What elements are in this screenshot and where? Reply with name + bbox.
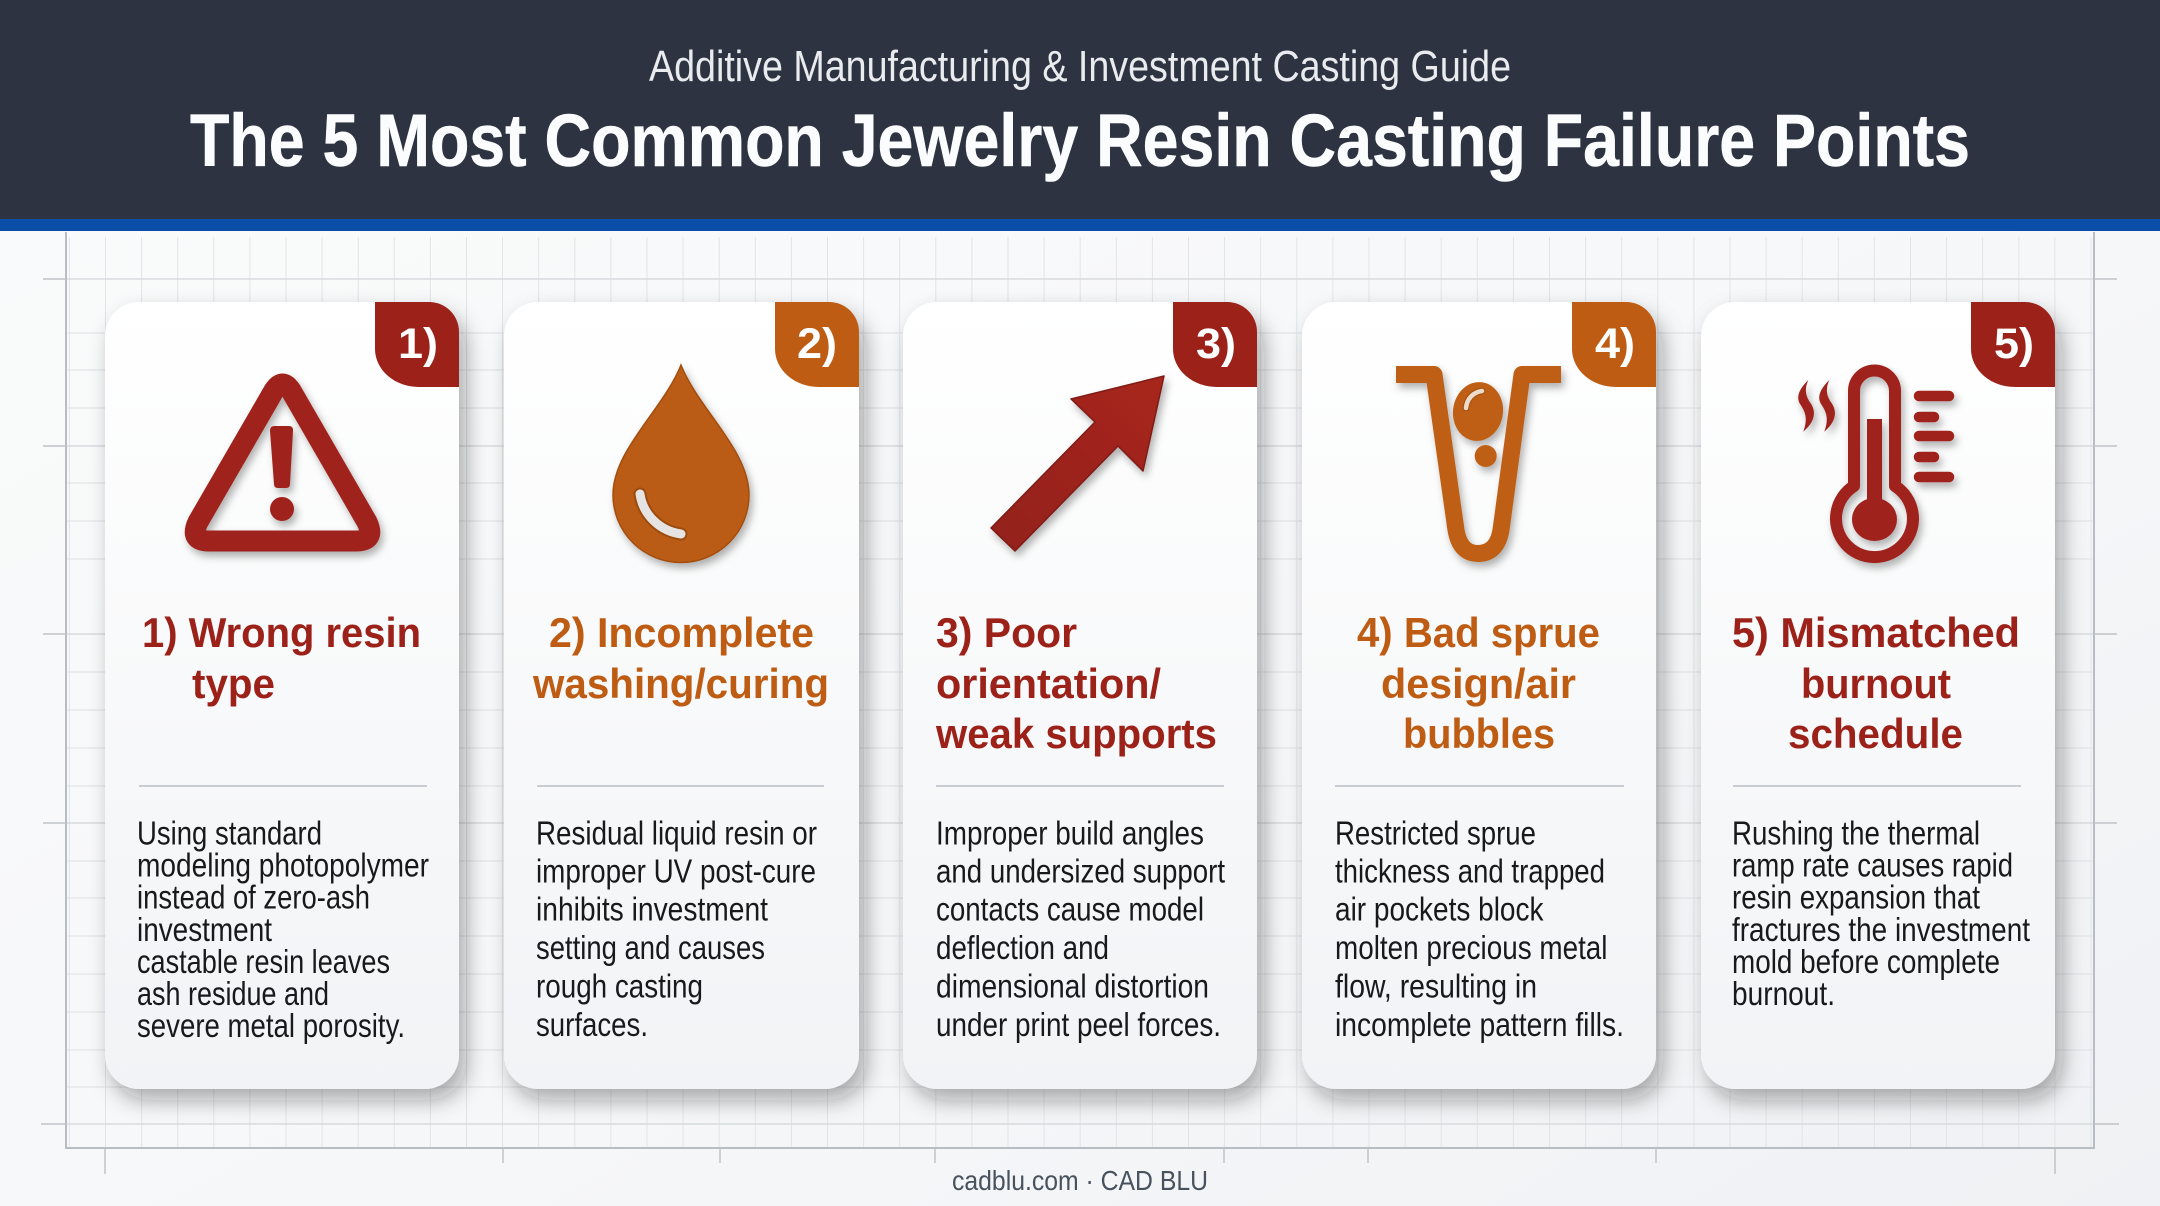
badge 2: 2) (797, 320, 837, 368)
heading 1: 1) Wrong resin (142, 609, 421, 656)
heading 5: 5) Mismatched (1732, 609, 2020, 656)
badge 3 (1173, 302, 1257, 387)
body text 5: mold before complete (1732, 943, 2000, 980)
panel: card 4 bad sprue design/air bubbles (1302, 302, 1656, 1089)
heading 4: 4) Bad sprue (1357, 609, 1600, 656)
body text 4: flow, resulting in (1335, 968, 1537, 1004)
body text 2: rough casting (536, 968, 703, 1004)
heading 3 (935, 609, 1217, 757)
body text 2: Residual liquid resin or (536, 814, 817, 852)
body text 4 (1335, 814, 1624, 1043)
heading 2: washing/curing (532, 660, 829, 707)
body text 3 (936, 814, 1225, 1043)
body text 4: molten precious metal (1335, 929, 1608, 966)
body text 1: severe metal porosity. (137, 1007, 405, 1044)
body text 5: burnout. (1732, 975, 1835, 1012)
panel: card 1 wrong resin type (105, 302, 459, 1089)
body text 5: Rushing the thermal (1732, 814, 1980, 852)
badge 4 (1572, 302, 1656, 387)
heading 3: 3) Poor (936, 609, 1077, 656)
body text 2: inhibits investment (536, 890, 768, 928)
body text 1: modeling photopolymer (137, 846, 429, 884)
badge 5: 5) (1994, 320, 2034, 368)
body text 5: ramp rate causes rapid (1732, 846, 2013, 884)
badge 3: 3) (1196, 320, 1236, 368)
panel: card 3 poor orientation/weak supports (903, 302, 1257, 1089)
heading 3: orientation/ (936, 660, 1161, 707)
body text 3: and undersized support (936, 852, 1225, 890)
body text 5: fractures the investment (1732, 911, 2030, 948)
body text 1: ash residue and (137, 975, 329, 1012)
body text 3: Improper build angles (936, 814, 1204, 852)
icon: diagonal arrow (991, 376, 1164, 551)
panel: card 5 mismatched burnout schedule (1701, 302, 2055, 1089)
heading 4: bubbles (1403, 710, 1555, 757)
heading 4: design/air (1381, 660, 1576, 707)
icon: sprue with air bubbles (1396, 374, 1561, 554)
body text 3: under print peel forces. (936, 1006, 1221, 1043)
technical grid background (41, 232, 2119, 1174)
body text 2: improper UV post-cure (536, 852, 816, 890)
badge 1 (375, 302, 459, 387)
body text 4: air pockets block (1335, 890, 1544, 928)
header subtitle: Additive Manufacturing & Investment Casting Guide (649, 42, 1511, 91)
panel: card 2 incomplete washing/curing (504, 302, 859, 1089)
footer credit: cadblu.com · CAD BLU (952, 1165, 1208, 1196)
heading 5: burnout (1801, 660, 1951, 707)
body text 2 (536, 814, 817, 1043)
body text 5: resin expansion that (1732, 878, 1980, 916)
heading 5 (1732, 609, 2020, 757)
header banner (0, 0, 2160, 231)
body text 2: setting and causes (536, 929, 765, 966)
body text 2: surfaces. (536, 1006, 648, 1043)
body text 4: incomplete pattern fills. (1335, 1006, 1624, 1043)
body text 5 (1732, 814, 2030, 1012)
heading 2: 2) Incomplete (549, 609, 814, 656)
heading 1: type (192, 660, 275, 707)
heading 2 (532, 609, 829, 707)
badge 4: 4) (1595, 320, 1635, 368)
body text 3: contacts cause model (936, 890, 1204, 928)
badge 2 (775, 302, 859, 387)
icon: warning triangle (195, 384, 370, 541)
body text 4: thickness and trapped (1335, 852, 1605, 890)
body text 1: Using standard (137, 814, 322, 852)
heading 4 (1357, 609, 1600, 757)
heading 1 (142, 609, 421, 707)
body text 3: dimensional distortion (936, 968, 1209, 1004)
body text 1: investment (137, 911, 272, 948)
heading 5: schedule (1788, 710, 1963, 757)
body text 1: castable resin leaves (137, 943, 390, 980)
body text 1: instead of zero-ash (137, 878, 370, 916)
body text 4: Restricted sprue (1335, 814, 1536, 852)
body text 1 (137, 814, 429, 1044)
icon: thermometer with heat waves (1798, 370, 1949, 557)
badge 5 (1971, 302, 2055, 387)
body text 3: deflection and (936, 929, 1109, 966)
heading 3: weak supports (935, 710, 1217, 757)
badge 1: 1) (398, 320, 438, 368)
icon: water drop (613, 365, 749, 562)
